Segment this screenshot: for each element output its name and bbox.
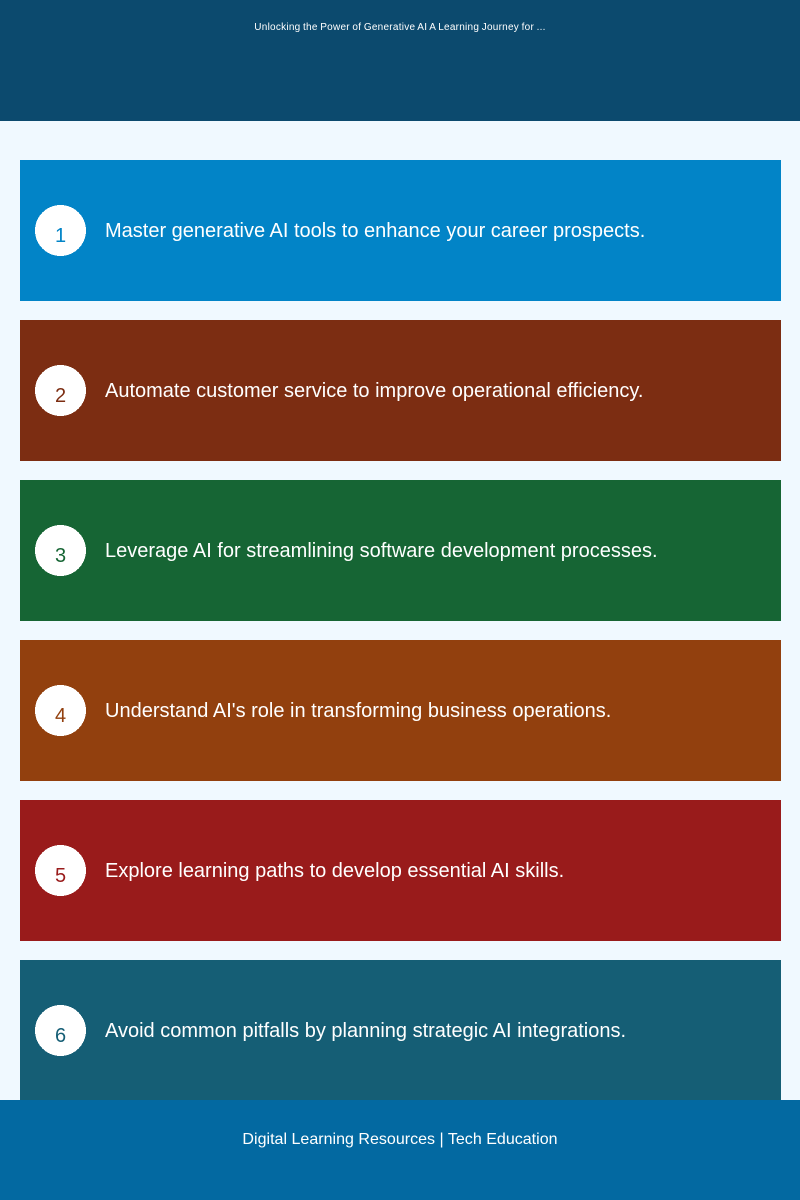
number 6: 6: [55, 1025, 66, 1047]
panel: step 4: [20, 640, 781, 781]
panel: step 2: [20, 320, 781, 461]
step 2 text: Automate customer service to improve operational efficiency.: [105, 380, 643, 402]
panel: step 1: [20, 160, 781, 301]
number 4: 4: [55, 705, 66, 727]
footer text: Digital Learning Resources | Tech Education: [242, 1131, 558, 1148]
icon: number badge circle 5: [35, 845, 86, 896]
step 1 text: Master generative AI tools to enhance your career prospects.: [105, 220, 645, 242]
icon: number badge circle 1: [35, 205, 86, 256]
footer: [0, 1100, 800, 1200]
step 3 text: Leverage AI for streamlining software development processes.: [105, 540, 658, 562]
number 5: 5: [55, 865, 66, 887]
panel: step 5: [20, 800, 781, 941]
panel: step 3: [20, 480, 781, 621]
number 3: 3: [55, 545, 66, 567]
icon: number badge circle 2: [35, 365, 86, 416]
title: Unlocking the Power of Generative AI A Learning Journey for ...: [254, 22, 546, 33]
number 2: 2: [55, 385, 66, 407]
icon: number badge circle 3: [35, 525, 86, 576]
icon: number badge circle 4: [35, 685, 86, 736]
number 1: 1: [55, 225, 66, 247]
step 5 text: Explore learning paths to develop essential AI skills.: [105, 860, 564, 882]
step 4 text: Understand AI's role in transforming business operations.: [105, 700, 611, 722]
header band: [0, 0, 800, 121]
icon: number badge circle 6: [35, 1005, 86, 1056]
panel: step 6: [20, 960, 781, 1101]
step 6 text: Avoid common pitfalls by planning strategic AI integrations.: [105, 1020, 626, 1042]
